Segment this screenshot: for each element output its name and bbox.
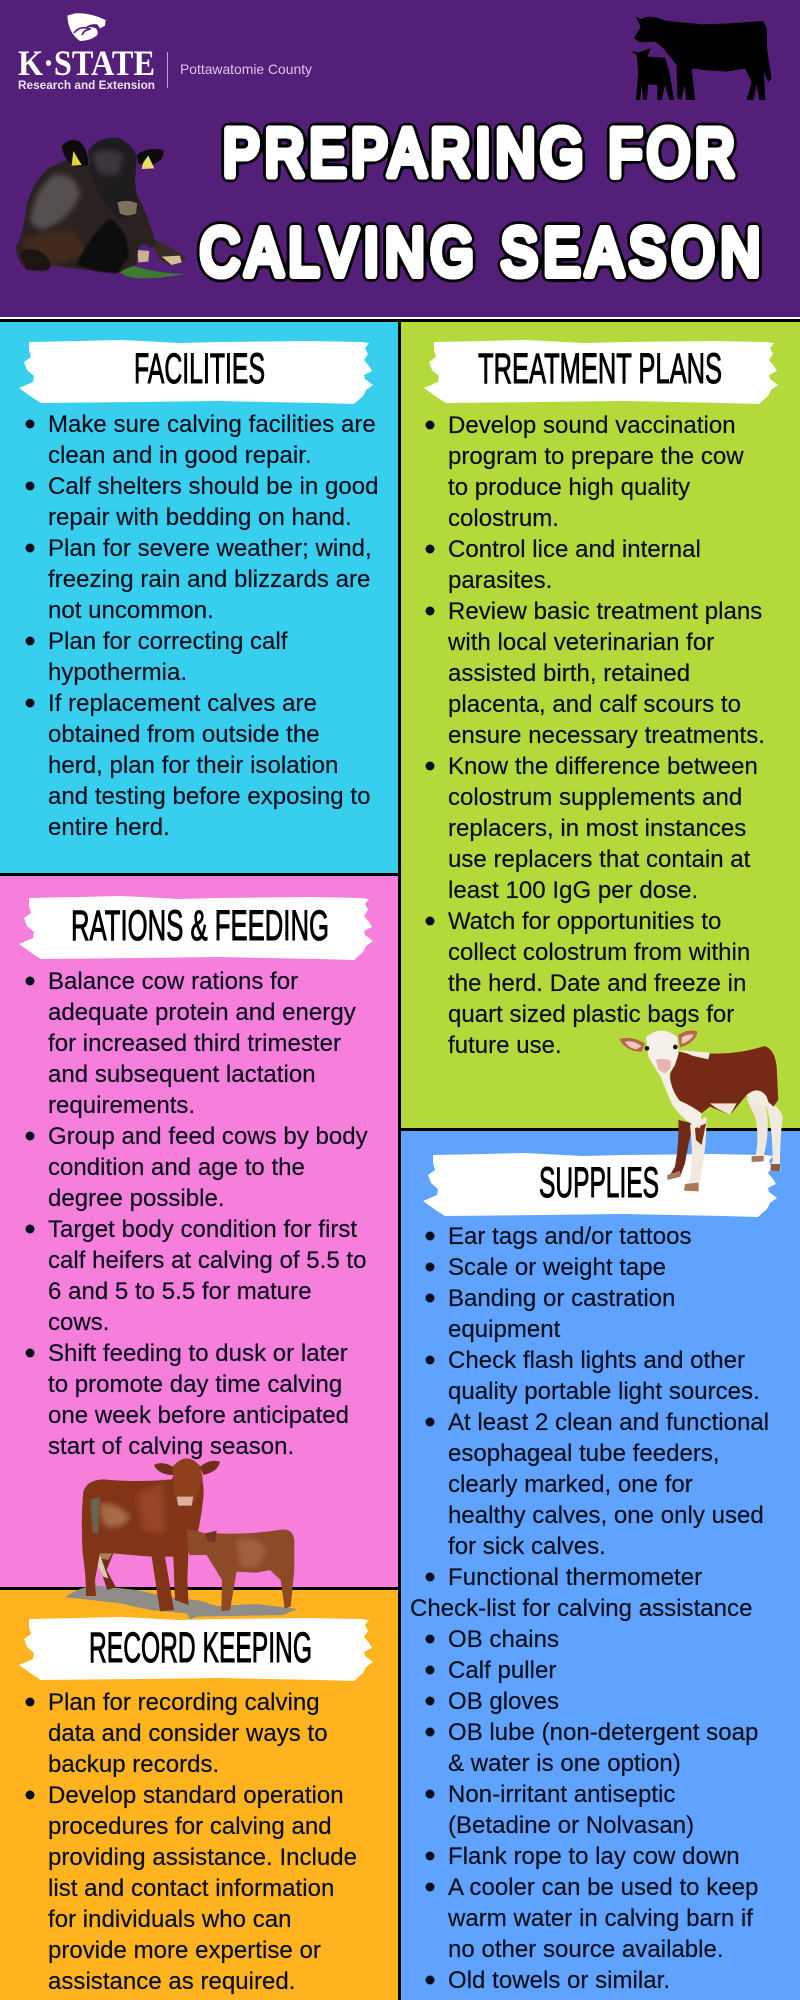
record keeping text: provide more expertise or [48, 1937, 321, 1964]
icon: black cow and calf silhouette [631, 17, 772, 100]
cow ears [154, 1463, 175, 1475]
facilities text: If replacement calves are [48, 690, 317, 717]
ear tags [72, 151, 82, 166]
rations text: one week before anticipated [48, 1402, 349, 1429]
treatment text: parasites. [448, 567, 552, 594]
dark foreleg [77, 218, 128, 273]
supplies text: Calf puller [448, 1657, 556, 1684]
supplies text: clearly marked, one for [448, 1471, 693, 1498]
supplies text: OB gloves [448, 1688, 559, 1715]
supplies text: healthy calves, one only used [448, 1502, 764, 1529]
header background [0, 0, 800, 317]
title line 2: CALVING SEASON [200, 215, 766, 289]
supplies text: Functional thermometer [448, 1564, 702, 1591]
body [16, 158, 157, 273]
rations bullets [26, 976, 34, 1358]
record keeping text: backup records. [48, 1751, 219, 1778]
facilities text: and testing before exposing to [48, 783, 370, 810]
rations text: Target body condition for first [48, 1216, 357, 1243]
rations text: and subsequent lactation [48, 1061, 316, 1088]
rations heading: RATIONS & FEEDING [71, 902, 329, 950]
logo divider [167, 52, 168, 88]
header white rule [0, 317, 800, 319]
supplies banner [423, 1153, 777, 1217]
panel: record keeping [0, 1588, 398, 2000]
treatment text: Develop sound vaccination [448, 412, 736, 439]
record keeping text: providing assistance. Include [48, 1844, 357, 1871]
rations text: Shift feeding to dusk or later [48, 1340, 348, 1367]
treatment text: Control lice and internal [448, 536, 701, 563]
treatment text: the herd. Date and freeze in [448, 970, 746, 997]
rations background [0, 876, 398, 1588]
treatment text: placenta, and calf scours to [448, 691, 741, 718]
rations text: start of calving season. [48, 1433, 294, 1460]
record keeping text: list and contact information [48, 1875, 334, 1902]
facilities text: herd, plan for their isolation [48, 752, 338, 779]
calf ears [619, 1038, 645, 1052]
facilities text: repair with bedding on hand. [48, 504, 352, 531]
calf hind legs [747, 1098, 768, 1161]
treatment text: collect colostrum from within [448, 939, 750, 966]
treatment text: ensure necessary treatments. [448, 722, 765, 749]
record keeping text: Plan for recording calving [48, 1689, 320, 1716]
cow body [82, 1473, 204, 1611]
supplies text: OB lube (non-detergent soap [448, 1719, 758, 1746]
body highlights [30, 175, 80, 230]
rations banner [19, 896, 373, 960]
calf neck patch [678, 1050, 710, 1059]
facilities banner [19, 340, 373, 404]
udder [97, 1550, 113, 1560]
calf head [646, 1031, 679, 1076]
rations text: Group and feed cows by body [48, 1123, 368, 1150]
facilities text: hypothermia. [48, 659, 187, 686]
Pottawatomie County: Pottawatomie County [180, 61, 312, 77]
record keeping text: for individuals who can [48, 1906, 292, 1933]
icon: lying black cow with ear tags [16, 138, 187, 278]
head [88, 138, 138, 218]
supplies text: warm water in calving barn if [447, 1905, 753, 1932]
record keeping banner [19, 1617, 373, 1681]
treatment background [401, 319, 800, 1128]
panel: header [0, 0, 800, 317]
supplies text: (Betadine or Nolvasan) [448, 1812, 694, 1839]
treatment text: quart sized plastic bags for [448, 1001, 734, 1028]
rations text: calf heifers at calving of 5.5 to [48, 1247, 366, 1274]
supplies text: Scale or weight tape [448, 1254, 666, 1281]
panel: treatment plans [401, 319, 800, 1128]
supplies text: Old towels or similar. [448, 1967, 670, 1994]
supplies text: quality portable light sources. [448, 1378, 760, 1405]
calf chest [658, 1072, 702, 1128]
treatment banner [424, 340, 778, 404]
supplies text: Banding or castration [448, 1285, 675, 1312]
treatment text: least 100 IgG per dose. [448, 877, 698, 904]
treatment text: with local veterinarian for [447, 629, 714, 656]
shadow [65, 1585, 297, 1619]
supplies bullets [426, 1232, 434, 1984]
panel: rations and feeding [0, 876, 398, 1588]
Research and Extension: Research and Extension [18, 78, 155, 92]
title [200, 115, 766, 289]
supplies text: equipment [448, 1316, 561, 1343]
front hooves [137, 250, 149, 262]
record keeping bullets [26, 1698, 34, 1800]
icon: hereford calf [619, 1031, 783, 1191]
treatment text: Watch for opportunities to [448, 908, 721, 935]
ears [62, 140, 88, 167]
treatment text: use replacers that contain at [448, 846, 751, 873]
calf front legs [667, 1120, 693, 1179]
rations text: to promote day time calving [48, 1371, 342, 1398]
rations text: degree possible. [48, 1185, 225, 1212]
facilities text: entire herd. [48, 814, 170, 841]
record keeping heading: RECORD KEEPING [89, 1624, 312, 1672]
facilities text: freezing rain and blizzards are [48, 566, 370, 593]
supplies text: & water is one option) [448, 1750, 681, 1777]
treatment text: to produce high quality [448, 474, 690, 501]
treatment text: replacers, in most instances [448, 815, 746, 842]
treatment text: program to prepare the cow [448, 443, 744, 470]
facilities text: Make sure calving facilities are [48, 411, 376, 438]
supplies text: Flank rope to lay cow down [448, 1843, 740, 1870]
treatment text: assisted birth, retained [448, 660, 690, 687]
treatment text: colostrum. [448, 505, 559, 532]
K-State logo [18, 13, 312, 92]
treatment text: future use. [448, 1032, 562, 1059]
facilities background [0, 319, 398, 876]
facilities text: clean and in good repair. [48, 442, 312, 469]
facilities text: Plan for correcting calf [48, 628, 288, 655]
panel: facilities [0, 319, 398, 876]
supplies text: no other source available. [448, 1936, 724, 1963]
treatment bullets [426, 420, 434, 926]
supplies text: Non-irritant antiseptic [448, 1781, 675, 1808]
supplies text: Check-list for calving assistance [410, 1595, 752, 1622]
treatment text: Review basic treatment plans [448, 598, 762, 625]
rations text: condition and age to the [48, 1154, 305, 1181]
facilities text: Plan for severe weather; wind, [48, 535, 372, 562]
rations text: Balance cow rations for [48, 968, 298, 995]
calf [187, 1529, 294, 1611]
supplies text: esophageal tube feeders, [448, 1440, 720, 1467]
record keeping text: procedures for calving and [48, 1813, 332, 1840]
record keeping background [0, 1588, 398, 2000]
icon: red cow and calf with shadow [65, 1458, 297, 1619]
facilities heading: FACILITIES [134, 345, 265, 393]
cow hind leg far [100, 1550, 116, 1590]
supplies text: for sick calves. [448, 1533, 606, 1560]
treatment text: Know the difference between [448, 753, 758, 780]
record keeping text: Develop standard operation [48, 1782, 344, 1809]
rations text: for increased third trimester [48, 1030, 341, 1057]
rations text: cows. [48, 1309, 110, 1336]
supplies text: Ear tags and/or tattoos [448, 1223, 692, 1250]
facilities text: not uncommon. [48, 597, 214, 624]
supplies text: Check flash lights and other [448, 1347, 745, 1374]
record keeping text: data and consider ways to [48, 1720, 328, 1747]
grass [120, 266, 184, 278]
calf body [670, 1046, 778, 1118]
supplies heading: SUPPLIES [539, 1159, 659, 1207]
record keeping text: assistance as required. [48, 1968, 296, 1995]
icon: wildcat [67, 13, 106, 41]
K-State wordmark: K·STATE [18, 43, 155, 83]
facilities text: Calf shelters should be in good [48, 473, 378, 500]
rations text: requirements. [48, 1092, 195, 1119]
rations text: adequate protein and energy [48, 999, 356, 1026]
supplies text: At least 2 clean and functional [448, 1409, 769, 1436]
supplies background [401, 1131, 800, 2000]
panel: supplies [401, 1131, 800, 2000]
supplies text: OB chains [448, 1626, 559, 1653]
treatment text: colostrum supplements and [448, 784, 742, 811]
rations text: 6 and 5 to 5.5 for mature [48, 1278, 312, 1305]
cow head [173, 1458, 203, 1506]
supplies text: A cooler can be used to keep [448, 1874, 758, 1901]
facilities text: obtained from outside the [48, 721, 320, 748]
facilities bullets [26, 420, 34, 708]
title line 1: PREPARING FOR [223, 115, 740, 190]
